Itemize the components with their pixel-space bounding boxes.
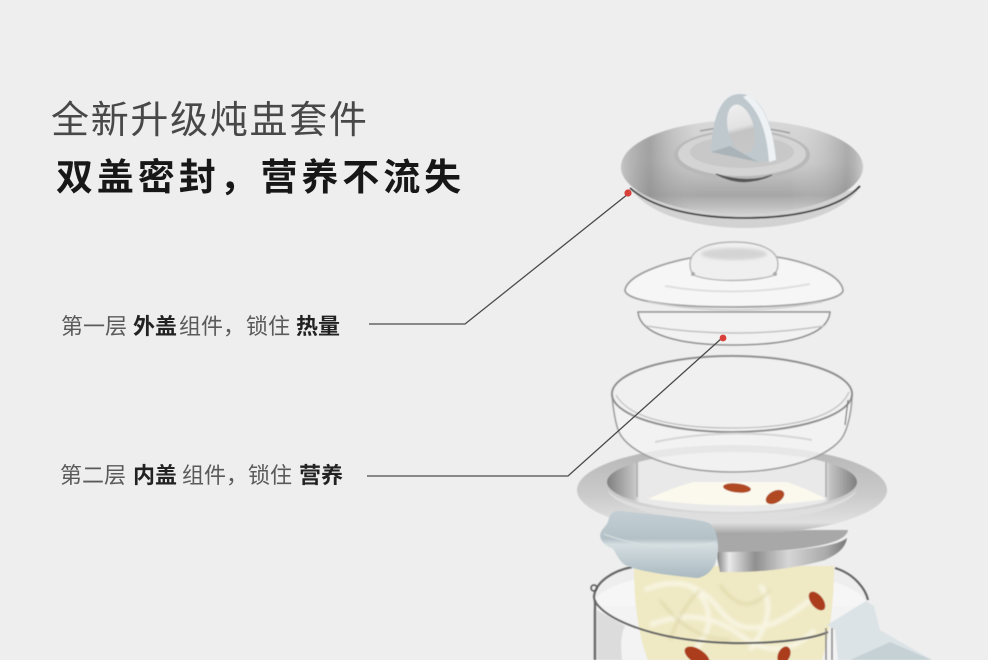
label: second layer (60, 463, 343, 488)
label: second layer: 组件， (182, 463, 248, 488)
label: second layer: 锁住 (248, 463, 292, 488)
label: second layer: 内盖 (133, 463, 177, 488)
outer lid (621, 94, 863, 228)
ring handle tab (600, 511, 718, 578)
goji berries (681, 589, 829, 660)
label: first layer: 第一层 (61, 314, 127, 339)
label: first layer: 热量 (296, 314, 340, 339)
title: 全新升级炖盅套件 (51, 100, 369, 142)
food surface (648, 482, 826, 506)
callout line: inner lid (367, 335, 726, 476)
label: first layer (61, 314, 340, 339)
stew pot body (591, 566, 932, 660)
glass inner lid (625, 242, 843, 345)
label: first layer: 锁住 (246, 314, 290, 339)
label: first layer: 外盖 (133, 314, 177, 339)
label: second layer: 第二层 (60, 463, 126, 488)
glass bowl (612, 356, 852, 472)
lid handle (711, 94, 776, 162)
callout line: outer lid (369, 189, 632, 324)
subtitle: 双盖密封，营养不流失 (56, 157, 465, 198)
label: second layer: 营养 (299, 463, 343, 488)
pot handle (826, 601, 932, 660)
steel collar ring (577, 445, 887, 535)
steel band under ring (712, 530, 848, 572)
label: first layer: 组件， (179, 314, 245, 339)
